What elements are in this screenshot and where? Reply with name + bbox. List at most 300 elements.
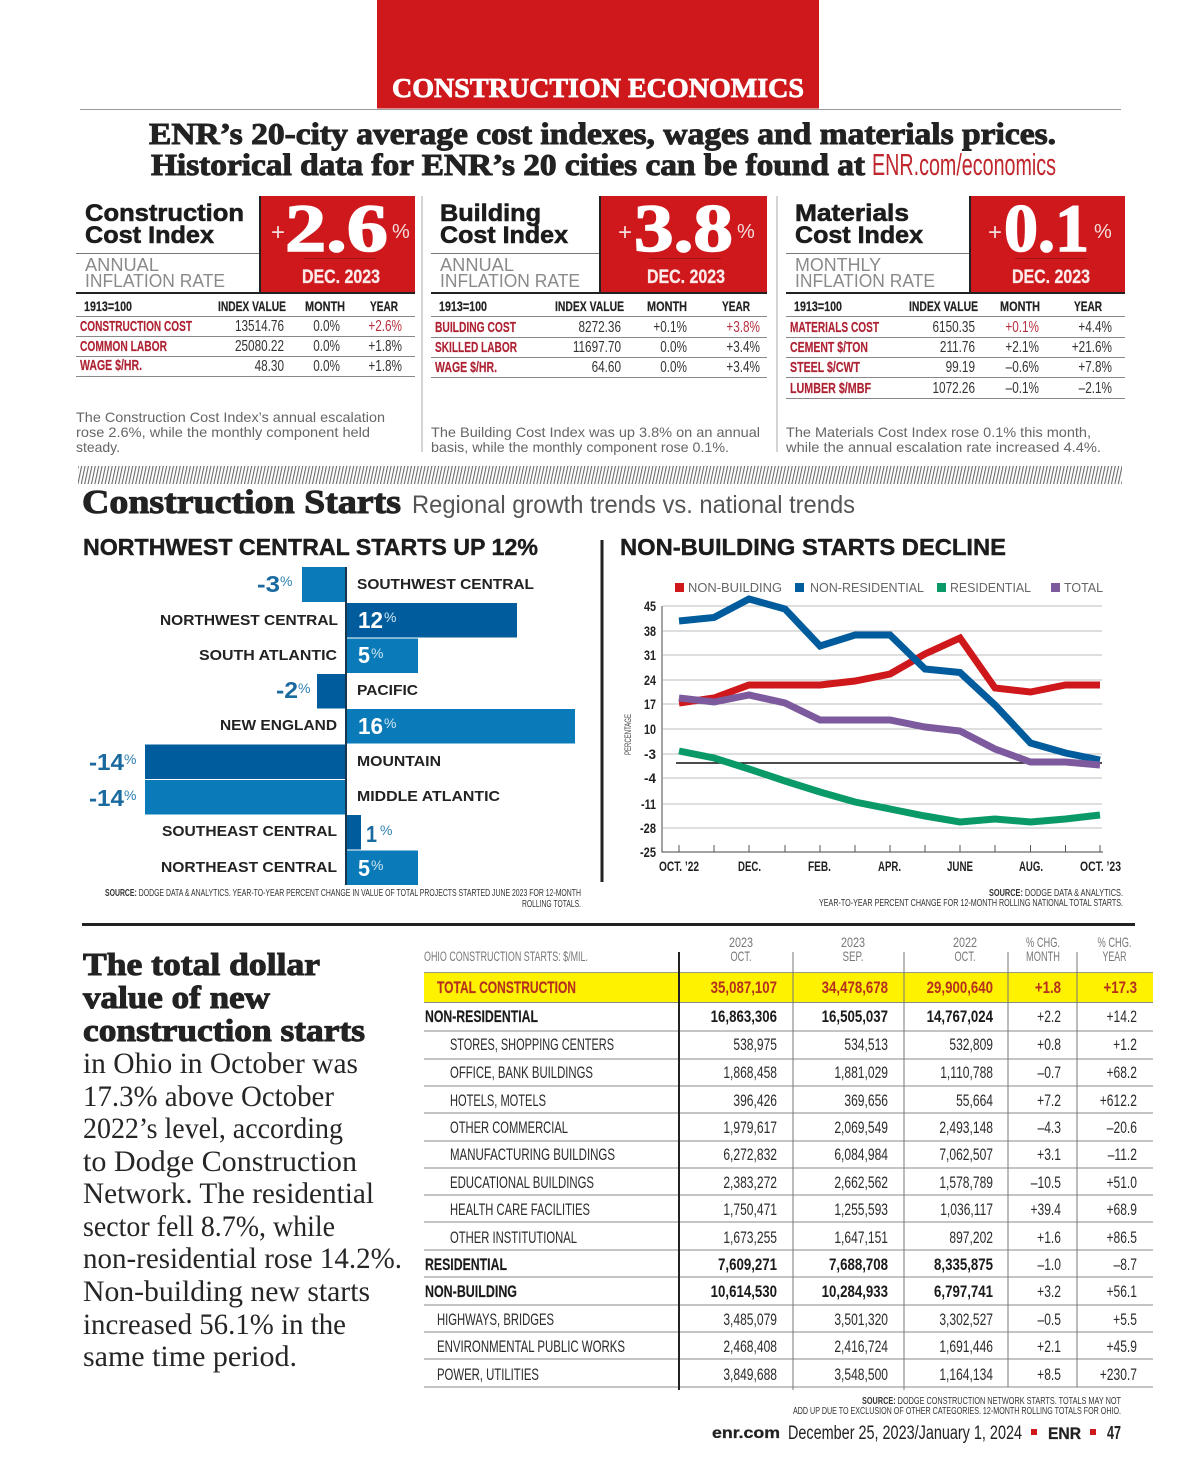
row: non-building: +3.2: [1037, 1283, 1061, 1302]
table: materials cost index: MATERIALS COST: [790, 320, 879, 336]
bar row: southwest central: -3: [257, 571, 280, 597]
table: construction cost index: 25080.22: [235, 336, 284, 354]
table: materials cost index: 211.76: [940, 337, 975, 355]
x axis labels: OCT. ’22: [659, 859, 699, 874]
annual inflation rate label: INFLATION RATE: [440, 271, 580, 291]
row: office: [450, 1063, 1137, 1083]
table: materials cost index: [786, 298, 1125, 399]
panel title: building cost index: [440, 200, 569, 249]
note: building cost index: [431, 424, 760, 455]
y axis labels: 17: [644, 697, 656, 712]
bar row: northeast central: NORTHEAST CENTRAL: [161, 859, 337, 876]
panel title: construction cost index: Construction: [85, 200, 244, 227]
row: other institutional: OTHER INSTITUTIONAL: [450, 1228, 577, 1247]
y axis labels: [640, 599, 656, 860]
bar row: middle atlantic: [89, 785, 500, 811]
note: construction cost index: [76, 409, 385, 455]
note: construction cost index: rose 2.6%, while the monthly component held: [76, 424, 370, 440]
note: construction cost index: The Construction Cost Index’s annual escalation: [76, 409, 385, 425]
bar row: northwest central: %: [384, 609, 396, 625]
row: environmental: +45.9: [1106, 1338, 1137, 1357]
table: materials cost index: CEMENT $/TON: [790, 340, 868, 356]
row: educational: 1,578,789: [939, 1174, 993, 1193]
row: manufacturing: –11.2: [1108, 1146, 1137, 1165]
table: materials cost index: +2.1%: [1005, 337, 1039, 355]
x axis labels: AUG.: [1019, 859, 1043, 874]
row: health care: 1,255,593: [834, 1201, 888, 1220]
table: building cost index: INDEX VALUE: [555, 298, 624, 314]
monthly inflation rate label: INFLATION RATE: [795, 271, 935, 291]
row: health care: [450, 1200, 1137, 1220]
panel title: materials cost index: Materials: [795, 200, 909, 227]
row: other commercial: OTHER COMMERCIAL: [450, 1118, 568, 1137]
row: environmental: [437, 1337, 1137, 1357]
row: non-building: 10,284,933: [822, 1283, 888, 1301]
y axis title: PERCENTAGE: [623, 714, 634, 755]
bar row: middle atlantic: %: [124, 787, 136, 803]
row: manufacturing: MANUFACTURING BUILDINGS: [450, 1145, 615, 1164]
row: stores: 532,809: [949, 1036, 993, 1055]
row: non-building: 10,614,530: [711, 1283, 777, 1301]
row: stores: 534,513: [844, 1036, 888, 1055]
row: educational: [450, 1173, 1137, 1193]
y axis labels: -25: [640, 845, 656, 860]
note: building cost index: basis, while the monthly component rose 0.1%.: [431, 439, 729, 455]
row: office: –0.7: [1038, 1064, 1061, 1083]
annual inflation rate label: ANNUAL: [440, 255, 514, 275]
row: hotels: HOTELS, MOTELS: [450, 1091, 546, 1110]
row: non-building: +56.1: [1106, 1283, 1137, 1302]
panel: materials cost index: [785, 190, 1125, 455]
row: other institutional: [450, 1228, 1137, 1248]
section heading: construction starts: Regional growth trends vs. national trends: [412, 491, 855, 519]
row: other commercial: 2,493,148: [939, 1119, 993, 1138]
row: stores: +0.8: [1037, 1036, 1061, 1055]
bar row: mountain: [89, 749, 441, 775]
x axis labels: [659, 859, 1121, 874]
table: building cost index: SKILLED LABOR: [435, 340, 517, 356]
row: power: +230.7: [1100, 1366, 1137, 1385]
row: highways: 3,302,527: [939, 1311, 993, 1330]
table: ohio construction starts: [424, 934, 1153, 1417]
text block: ohio summary: same time period.: [83, 1340, 297, 1373]
table: materials cost index: LUMBER $/MBF: [790, 381, 871, 397]
bar row: mountain: -14: [89, 749, 124, 775]
row: health care: 1,036,117: [940, 1201, 993, 1220]
y axis labels: 24: [644, 673, 656, 688]
panel title: materials cost index: Cost Index: [795, 222, 924, 249]
page footer: enr.com: [712, 1425, 780, 1442]
y axis labels: -4: [644, 771, 656, 786]
row: office: OFFICE, BANK BUILDINGS: [450, 1063, 593, 1082]
row: environmental: 2,416,724: [834, 1338, 888, 1357]
main headline: ENR’s 20-city average cost indexes, wages and materials prices.: [149, 116, 1056, 151]
text block: ohio summary: value of new: [83, 979, 270, 1015]
bar row: middle atlantic: -14: [89, 785, 124, 811]
bar row: northeast central: [161, 855, 383, 881]
row: environmental: ENVIRONMENTAL PUBLIC WORKS: [437, 1337, 625, 1356]
bar row: south atlantic: %: [371, 645, 383, 661]
red callout: +0.1%: %: [1094, 221, 1112, 243]
row: educational: 2,662,562: [834, 1174, 888, 1193]
row: non-residential: +2.2: [1037, 1008, 1061, 1027]
row: hotels: 396,426: [733, 1092, 777, 1111]
text block: ohio summary: construction starts: [83, 1012, 365, 1048]
table header: OCT.: [730, 948, 752, 964]
legend: NON-BUILDING: [688, 580, 782, 595]
table: building cost index: 8272.36: [579, 317, 621, 335]
bar row: southwest central: [257, 571, 534, 597]
table header: 2023: [841, 934, 865, 950]
table header: % CHG.: [1098, 934, 1132, 950]
row: non-building: NON-BUILDING: [425, 1282, 517, 1301]
row: other institutional: 1,647,151: [834, 1229, 888, 1248]
bar row: northwest central: 12: [358, 607, 383, 633]
section heading: construction starts: [82, 484, 855, 521]
table: building cost index: 0.0%: [660, 357, 687, 375]
panel title: building cost index: Cost Index: [440, 222, 569, 249]
table: construction cost index: COMMON LABOR: [80, 339, 167, 355]
page footer: ENR: [1048, 1424, 1081, 1443]
page footer: 47: [1107, 1423, 1121, 1443]
bar row: southeast central: 1: [366, 821, 377, 847]
highlighted row: total construction: 35,087,107: [711, 979, 777, 997]
row: non-residential: 16,863,306: [711, 1008, 777, 1026]
text block: ohio summary: increased 56.1% in the: [83, 1308, 346, 1341]
row: non-residential: +14.2: [1106, 1008, 1137, 1027]
x axis labels: APR.: [878, 859, 901, 874]
panel title: building cost index: Building: [440, 200, 541, 227]
table: building cost index: 64.60: [592, 357, 621, 375]
main headline: ENR.com/economics: [872, 147, 1056, 182]
source note: table: [793, 1395, 1121, 1417]
header banner: [80, 0, 1121, 110]
table: materials cost index: STEEL $/CWT: [790, 360, 860, 376]
row: hotels: 369,656: [844, 1092, 888, 1111]
row: office: 1,881,029: [834, 1064, 888, 1083]
row: educational: +51.0: [1106, 1174, 1137, 1193]
table header: 2023: [729, 934, 753, 950]
row: other institutional: 897,202: [949, 1229, 993, 1248]
table: building cost index: 11697.70: [573, 337, 621, 355]
panel title: construction cost index: [85, 200, 244, 249]
note: materials cost index: The Materials Cost Index rose 0.1% this month,: [786, 424, 1091, 440]
row: highways: 3,501,320: [834, 1311, 888, 1330]
note: construction cost index: steady.: [76, 439, 120, 455]
row: residential: 8,335,875: [934, 1256, 993, 1274]
row: environmental: 1,691,446: [939, 1338, 993, 1357]
y axis labels: 38: [644, 624, 656, 639]
red callout: +2.6%: DEC. 2023: [302, 267, 380, 288]
row: highways: [437, 1310, 1137, 1330]
highlighted row: total construction: +17.3: [1103, 979, 1137, 997]
table header: % CHG.: [1026, 934, 1060, 950]
row: power: 3,548,500: [834, 1366, 888, 1385]
row: residential: 7,688,708: [829, 1256, 888, 1274]
bar row: southeast central: SOUTHEAST CENTRAL: [162, 823, 337, 840]
red callout: +0.1%: DEC. 2023: [1012, 267, 1090, 288]
bar row: pacific: PACIFIC: [357, 682, 418, 699]
bar row: south atlantic: SOUTH ATLANTIC: [199, 647, 337, 664]
table header: OHIO CONSTRUCTION STARTS: $/MIL.: [424, 949, 588, 964]
table: construction cost index: INDEX VALUE: [218, 298, 286, 314]
bar row: northeast central: %: [371, 857, 383, 873]
legend: NON-RESIDENTIAL: [810, 580, 924, 595]
row: residential: [425, 1255, 1137, 1275]
red callout: +3.8%: %: [737, 221, 755, 243]
table: materials cost index: 1072.26: [933, 378, 975, 396]
source note: regional chart: [105, 887, 581, 910]
text block: ohio summary: in Ohio in October was: [83, 1047, 358, 1080]
table: building cost index: YEAR: [722, 298, 750, 314]
annual inflation rate label: ANNUAL: [85, 255, 159, 275]
text block: ohio summary: 17.3% above October: [83, 1080, 334, 1113]
row: power: [437, 1365, 1137, 1385]
row: educational: –10.5: [1031, 1174, 1061, 1193]
table: building cost index: BUILDING COST: [435, 320, 516, 336]
bar row: south atlantic: [199, 642, 383, 668]
panel: regional bar chart: [83, 534, 581, 910]
chart heading: national: NON-BUILDING STARTS DECLINE: [620, 534, 1006, 560]
table: construction cost index: [76, 298, 415, 377]
x axis labels: FEB.: [808, 859, 831, 874]
row: non-residential: 14,767,024: [927, 1008, 993, 1026]
row: other institutional: 1,673,255: [723, 1229, 777, 1248]
table: materials cost index: INDEX VALUE: [909, 298, 978, 314]
source note: regional chart: ROLLING TOTALS.: [522, 898, 581, 910]
source note: national chart: [819, 887, 1123, 909]
row: office: +68.2: [1106, 1064, 1137, 1083]
bar row: new england: [220, 713, 396, 739]
source note: regional chart: SOURCE: DODGE DATA & ANALYTICS. YEAR-TO-YEAR PERCENT CHANGE IN VALUE OF TOTAL PROJECTS STARTED JUNE 2023 FOR 12-MONTH: [105, 887, 581, 899]
text block: ohio summary: [83, 946, 402, 1373]
legend: [675, 580, 1103, 595]
x axis labels: DEC.: [738, 859, 761, 874]
table: construction cost index: 0.0%: [313, 316, 340, 334]
row: other commercial: 1,979,617: [723, 1119, 777, 1138]
main headline: Historical data for ENR’s 20 cities can be found at: [151, 147, 866, 182]
row: power: POWER, UTILITIES: [437, 1365, 539, 1384]
row: office: 1,110,788: [940, 1064, 993, 1083]
y axis labels: 10: [644, 722, 656, 737]
table: building cost index: MONTH: [647, 298, 687, 314]
text block: ohio summary: Non-building new starts: [83, 1275, 370, 1308]
source note: national chart: SOURCE: DODGE DATA & ANALYTICS.: [989, 887, 1123, 899]
header banner: CONSTRUCTION ECONOMICS: [392, 73, 804, 103]
row: other institutional: +86.5: [1106, 1229, 1137, 1248]
table header: 2022: [953, 934, 977, 950]
legend: TOTAL: [1064, 580, 1103, 595]
row: educational: EDUCATIONAL BUILDINGS: [450, 1173, 594, 1192]
bar row: southwest central: %: [280, 573, 292, 589]
red callout: +0.1%: +: [988, 219, 1002, 246]
table: materials cost index: +4.4%: [1078, 317, 1112, 335]
table header: SEP.: [842, 948, 864, 964]
highlighted row: total construction: [424, 972, 1153, 1002]
section heading: construction starts: Construction Starts: [82, 484, 401, 521]
bar row: northwest central: [160, 607, 396, 633]
table: materials cost index: +7.8%: [1078, 357, 1112, 375]
row: hotels: +7.2: [1037, 1092, 1061, 1111]
row: residential: –8.7: [1114, 1256, 1137, 1275]
table: building cost index: +3.8%: [726, 317, 760, 335]
red callout: +3.8%: DEC. 2023: [647, 267, 725, 288]
bar row: northwest central: NORTHWEST CENTRAL: [160, 612, 338, 629]
row: health care: HEALTH CARE FACILITIES: [450, 1200, 590, 1219]
x axis labels: JUNE: [947, 859, 973, 874]
table: materials cost index: –2.1%: [1079, 378, 1112, 396]
row: non-residential: 16,505,037: [822, 1008, 888, 1026]
table: materials cost index: +0.1%: [1005, 317, 1039, 335]
note: materials cost index: while the annual escalation rate increased 4.4%.: [785, 439, 1101, 455]
row: educational: 2,383,272: [723, 1174, 777, 1193]
row: health care: +39.4: [1030, 1201, 1061, 1220]
diverging bar chart: [145, 567, 575, 885]
table: building cost index: +3.4%: [726, 337, 760, 355]
main headline: [149, 116, 1056, 182]
panel title: materials cost index: [795, 200, 924, 249]
row: non-residential: NON-RESIDENTIAL: [425, 1007, 538, 1026]
row: other commercial: –4.3: [1038, 1119, 1061, 1138]
row: health care: 1,750,471: [723, 1201, 777, 1220]
y axis labels: -3: [644, 747, 656, 762]
row: manufacturing: [450, 1145, 1137, 1165]
x axis labels: OCT. ’23: [1080, 859, 1121, 874]
chart heading: regional: NORTHWEST CENTRAL STARTS UP 12%: [83, 534, 538, 560]
row: residential: –1.0: [1038, 1256, 1061, 1275]
table: materials cost index: –0.6%: [1006, 357, 1039, 375]
y axis labels: -28: [640, 821, 656, 836]
highlighted row: total construction: 29,900,640: [927, 979, 993, 997]
row: highways: 3,485,079: [723, 1311, 777, 1330]
table: construction cost index: 48.30: [255, 356, 284, 374]
row: manufacturing: 6,084,984: [834, 1146, 888, 1165]
bar row: pacific: -2: [276, 677, 298, 703]
table: building cost index: +0.1%: [653, 317, 687, 335]
row: residential: RESIDENTIAL: [425, 1255, 507, 1274]
row: other institutional: +1.6: [1037, 1229, 1061, 1248]
bar row: new england: %: [384, 715, 396, 731]
red callout: +0.1%: 0.1: [1004, 190, 1089, 266]
row: stores: 538,975: [733, 1036, 777, 1055]
table: materials cost index: –0.1%: [1006, 378, 1039, 396]
note: building cost index: The Building Cost Index was up 3.8% on an annual: [431, 424, 760, 440]
red callout: +0.1%: [969, 190, 1125, 293]
row: other commercial: –20.6: [1107, 1119, 1137, 1138]
row rules and column lines: [424, 1002, 1153, 1387]
table: construction cost index: YEAR: [370, 298, 398, 314]
bar row: south atlantic: 5: [358, 642, 370, 668]
row: power: 3,849,688: [723, 1366, 777, 1385]
row: other commercial: [450, 1118, 1137, 1138]
table: building cost index: +3.4%: [726, 357, 760, 375]
row: hotels: +612.2: [1100, 1092, 1137, 1111]
row: environmental: +2.1: [1037, 1338, 1061, 1357]
highlighted row: total construction: TOTAL CONSTRUCTION: [437, 978, 576, 997]
table: construction cost index: 13514.76: [235, 316, 284, 334]
row: manufacturing: +3.1: [1037, 1146, 1061, 1165]
table: construction cost index: WAGE $/HR.: [80, 358, 142, 374]
table: building cost index: WAGE $/HR.: [435, 360, 497, 376]
bar row: pacific: %: [298, 680, 310, 696]
row: power: 1,164,134: [939, 1366, 993, 1385]
monthly inflation rate label: [795, 255, 935, 291]
table: construction cost index: MONTH: [305, 298, 345, 314]
row: stores: +1.2: [1113, 1036, 1137, 1055]
y axis labels: 31: [644, 648, 656, 663]
row: other commercial: 2,069,549: [834, 1119, 888, 1138]
row: non-building: 6,797,741: [934, 1283, 993, 1301]
table: materials cost index: +21.6%: [1072, 337, 1112, 355]
table: materials cost index: YEAR: [1074, 298, 1102, 314]
table: materials cost index: 1913=100: [794, 298, 842, 314]
table: construction cost index: CONSTRUCTION COST: [80, 319, 192, 335]
red callout: +2.6%: [259, 190, 415, 293]
red callout: +2.6%: 2.6: [285, 190, 388, 266]
line chart plot: [662, 599, 1103, 852]
row: hotels: [450, 1091, 1137, 1111]
y axis labels: -11: [641, 797, 656, 812]
table: construction cost index: 1913=100: [84, 298, 132, 314]
text block: ohio summary: to Dodge Construction: [83, 1145, 357, 1178]
red callout: +2.6%: %: [392, 221, 410, 243]
table header: MONTH: [1026, 948, 1060, 964]
table header: [424, 934, 1132, 964]
row: manufacturing: 7,062,507: [939, 1146, 993, 1165]
text block: ohio summary: 2022’s level, according: [83, 1112, 343, 1145]
bar row: middle atlantic: MIDDLE ATLANTIC: [357, 788, 500, 805]
text block: ohio summary: The total dollar: [83, 946, 320, 982]
table: building cost index: 0.0%: [660, 337, 687, 355]
row: non-building: [425, 1282, 1137, 1302]
row: health care: +68.9: [1106, 1201, 1137, 1220]
annual inflation rate label: [440, 255, 580, 291]
red callout: +3.8%: +: [618, 219, 632, 246]
table: materials cost index: 6150.35: [933, 317, 975, 335]
table: construction cost index: +1.8%: [368, 336, 402, 354]
page footer: December 25, 2023/January 1, 2024: [788, 1423, 1022, 1444]
bar row: new england: 16: [358, 713, 383, 739]
row: environmental: 2,468,408: [723, 1338, 777, 1357]
panel title: construction cost index: Cost Index: [85, 222, 215, 249]
monthly inflation rate label: MONTHLY: [795, 255, 881, 275]
red callout: +2.6%: +: [271, 219, 285, 246]
row: stores: [450, 1035, 1137, 1055]
row: non-residential: [425, 1007, 1137, 1027]
y axis labels: 45: [644, 599, 656, 614]
table header: YEAR: [1102, 948, 1126, 964]
note: materials cost index: [785, 424, 1101, 455]
row: manufacturing: 6,272,832: [723, 1146, 777, 1165]
bar row: pacific: [276, 677, 418, 703]
highlighted row: total construction: 34,478,678: [822, 979, 888, 997]
table: building cost index: [431, 298, 767, 378]
row: highways: +5.5: [1113, 1311, 1137, 1330]
bar row: mountain: MOUNTAIN: [357, 753, 441, 770]
bar row: new england: NEW ENGLAND: [220, 717, 337, 734]
table: building cost index: 1913=100: [439, 298, 487, 314]
panel: construction cost index: [76, 190, 415, 455]
annual inflation rate label: [85, 255, 225, 291]
table: materials cost index: MONTH: [1000, 298, 1040, 314]
table header: OCT.: [954, 948, 976, 964]
row: office: 1,868,458: [723, 1064, 777, 1083]
table: construction cost index: +2.6%: [368, 316, 402, 334]
red callout: +3.8%: 3.8: [634, 190, 733, 266]
red callout: +3.8%: [599, 190, 767, 293]
row: highways: HIGHWAYS, BRIDGES: [437, 1310, 554, 1329]
bar row: southwest central: SOUTHWEST CENTRAL: [357, 576, 534, 593]
